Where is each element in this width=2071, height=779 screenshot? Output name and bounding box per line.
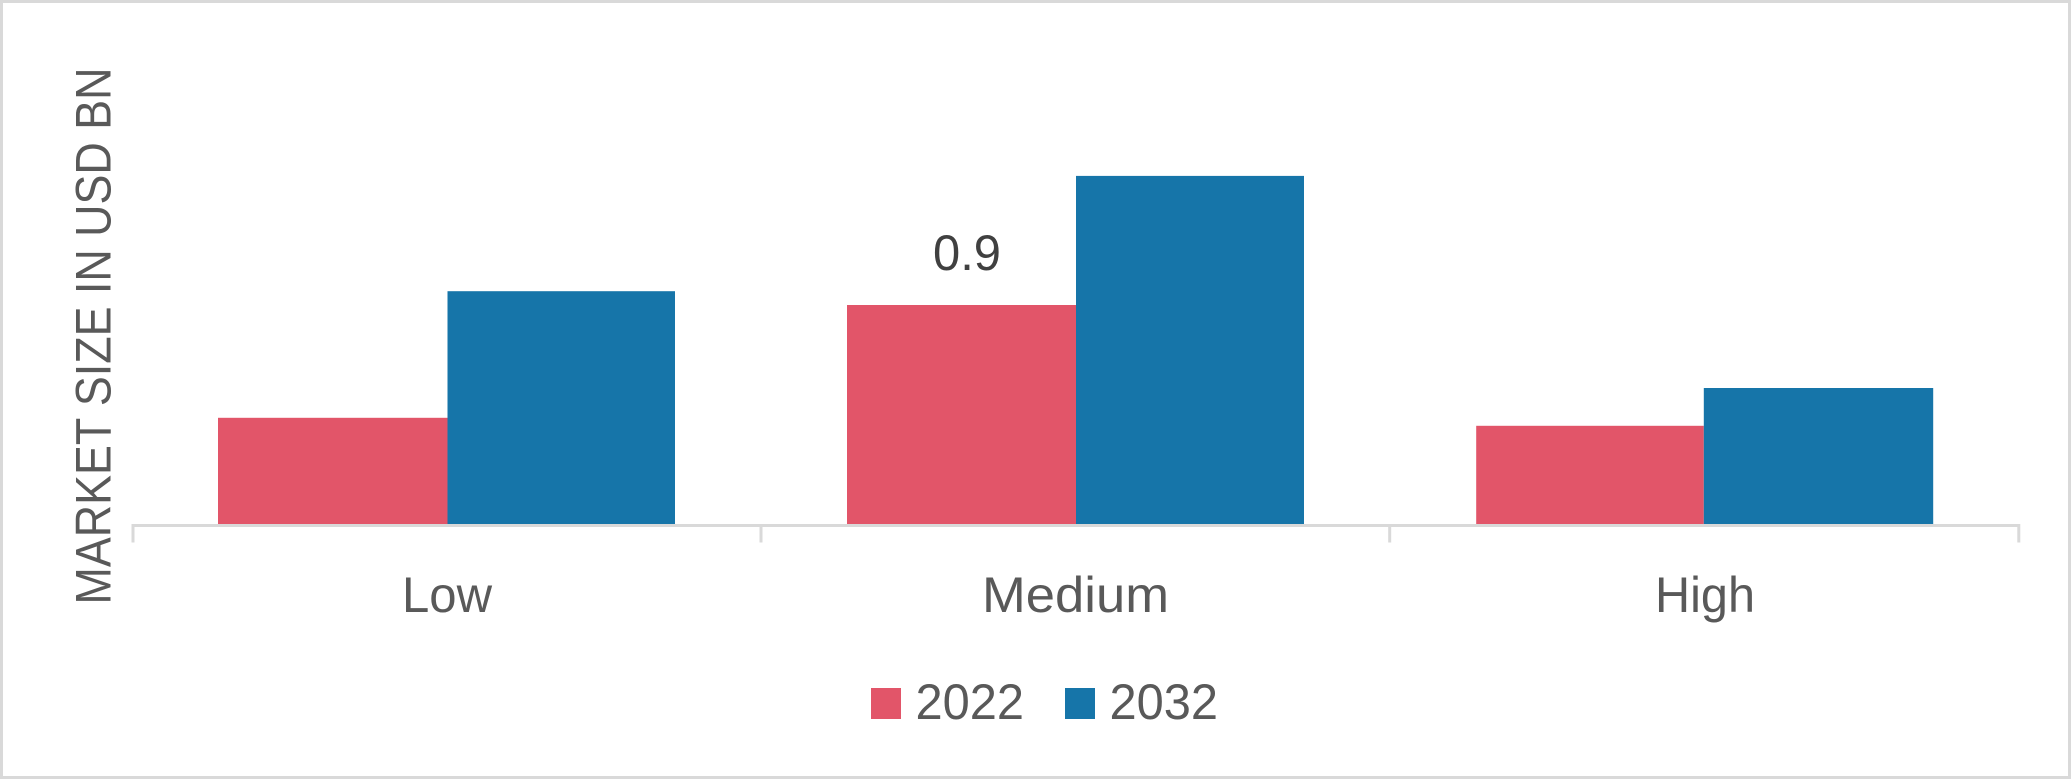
bar group: Low (218, 291, 675, 524)
legend (871, 674, 1218, 730)
legend label: 2032: 2032 (1110, 674, 1218, 730)
bar group: High (1476, 388, 1933, 524)
category label: Medium: Medium (982, 567, 1169, 623)
category label: High: High (1655, 567, 1755, 623)
bar: Low 2022 (218, 418, 448, 524)
bar: High 2032 (1704, 388, 1933, 524)
data label: Medium 2022 value: 0.9 (933, 225, 1001, 281)
x axis with tick marks (133, 526, 2019, 542)
legend swatch: 2032 (1065, 688, 1095, 719)
legend swatch: 2022 (871, 688, 901, 719)
bar: Low 2032 (448, 291, 675, 524)
bar: High 2022 (1476, 426, 1704, 524)
legend label: 2022: 2022 (916, 674, 1024, 730)
bar: Medium 2022 (847, 305, 1076, 524)
bar: Medium 2032 (1076, 176, 1304, 524)
category label: Low: Low (402, 567, 493, 623)
bar group: Medium (847, 176, 1304, 524)
y-axis title: MARKET SIZE IN USD BN (66, 68, 122, 604)
